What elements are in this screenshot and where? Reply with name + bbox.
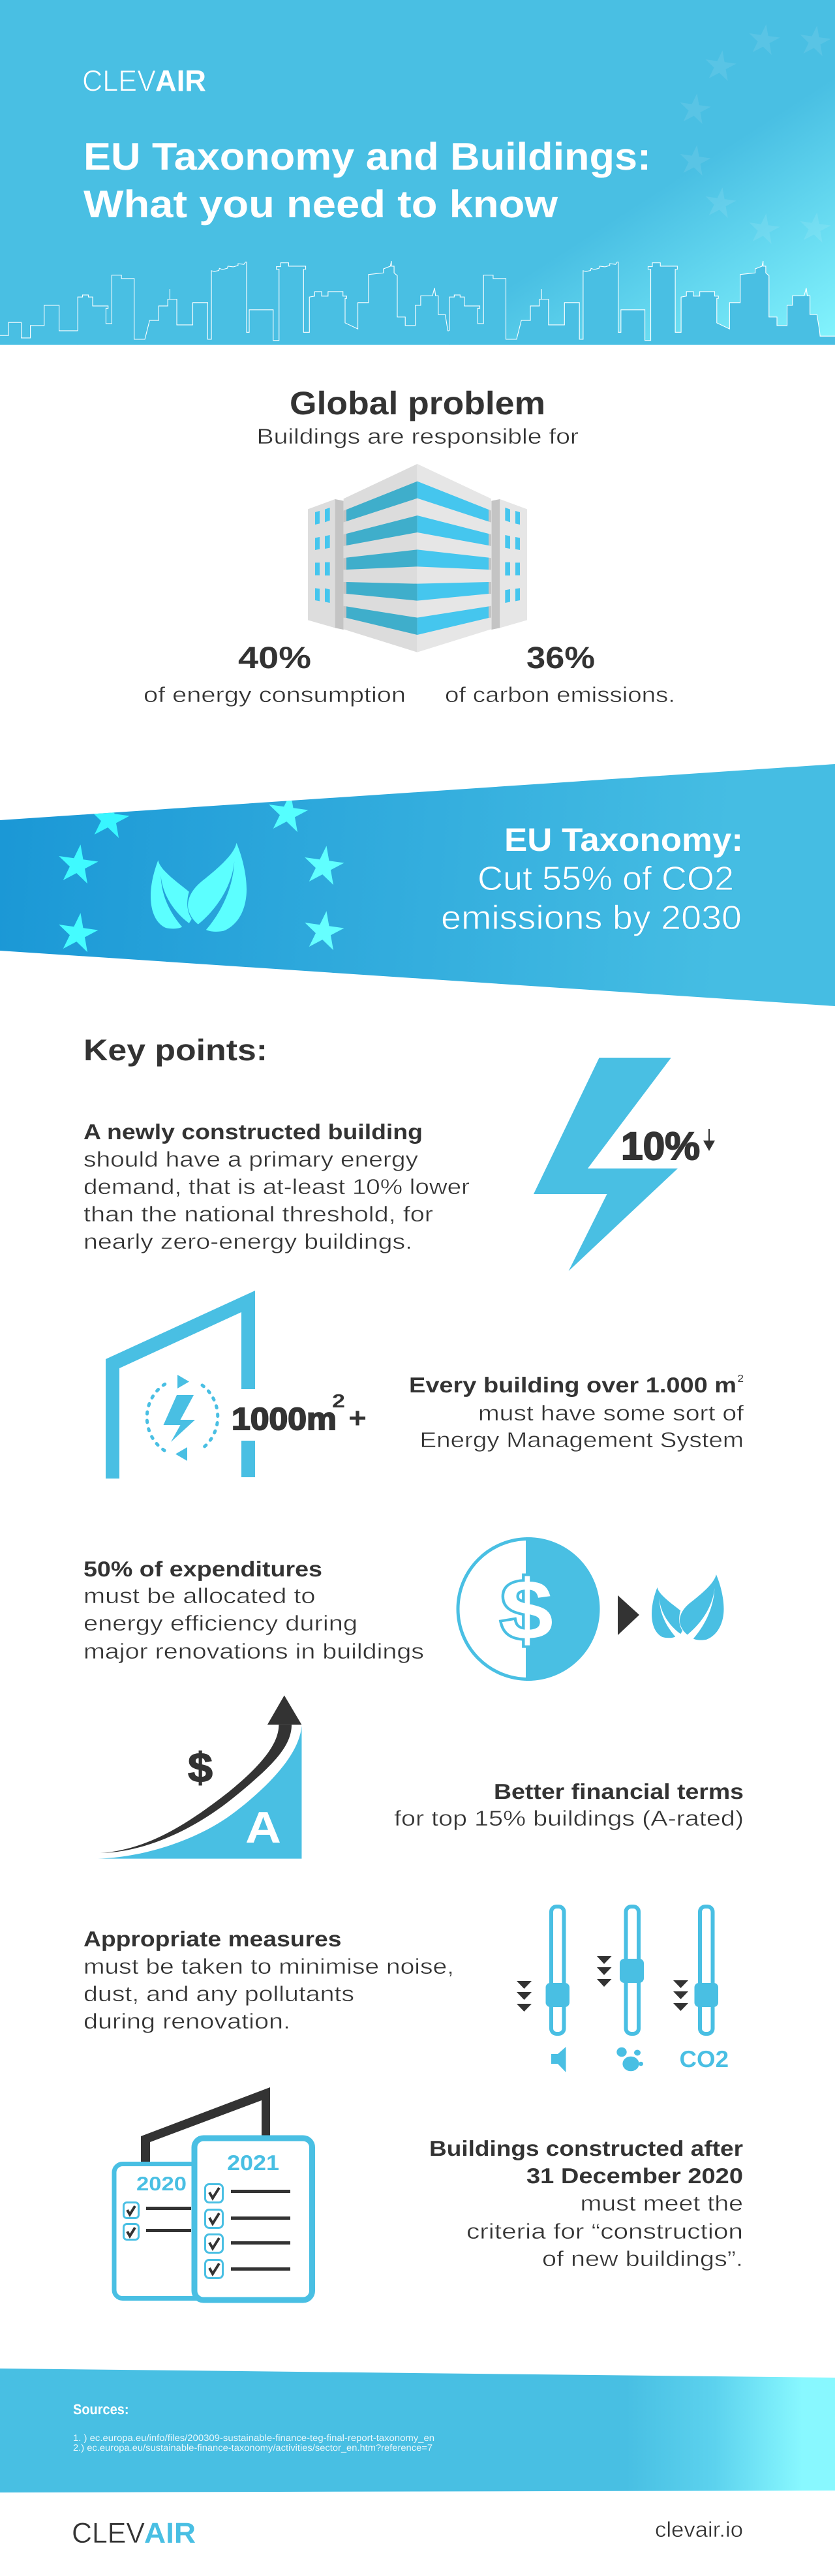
stat: energy consumption: 40%	[238, 640, 311, 675]
panel: sources band	[0, 2369, 835, 2492]
text: EU taxonomy goal: Cut 55% of CO2	[478, 860, 734, 898]
stat: energy consumption: of energy consumption	[144, 682, 406, 707]
panel: key point appropriate measures	[84, 1907, 729, 2072]
label: CO2: CO2	[680, 2046, 729, 2072]
sources list: 2.) ec.europa.eu/sustainable-finance-taxonomy/activities/sector_en.htm?reference=7	[73, 2442, 433, 2453]
text block: Appropriate measures	[84, 1927, 342, 1951]
text block	[429, 2136, 743, 2271]
text block: must have some sort of	[478, 1401, 744, 1425]
arrow	[618, 1595, 639, 1635]
icon: rising curve: $	[188, 1744, 213, 1791]
text block: of new buildings”.	[542, 2246, 743, 2271]
text block: Better financial terms	[494, 1779, 744, 1803]
skyline	[0, 261, 835, 345]
icon: checklists	[114, 2087, 312, 2300]
title: EU Taxonomy and Buildings:	[84, 135, 651, 178]
label: 10 percent down: 10%	[621, 1124, 700, 1168]
text block: should have a primary energy	[84, 1147, 419, 1171]
chart: level sliders	[517, 1907, 718, 2034]
panel: global problem	[144, 385, 675, 707]
title: What you need to know	[84, 183, 558, 226]
panel: EU taxonomy band	[0, 764, 835, 1006]
panel: key point financial terms	[98, 1695, 744, 1859]
text block: Every building over 1.000 m	[409, 1373, 736, 1397]
text block	[84, 1120, 470, 1253]
icon: EU stars	[55, 790, 346, 953]
text block	[409, 1373, 744, 1452]
panel: header	[0, 0, 835, 345]
text block: A newly constructed building	[84, 1120, 423, 1144]
text block: than the national threshold, for	[84, 1202, 433, 1226]
text block: during renovation.	[84, 2009, 290, 2033]
text block: major renovations in buildings	[84, 1639, 424, 1663]
icon: checklists: 2021	[227, 2151, 279, 2175]
sources list: 1. ) ec.europa.eu/info/files/200309-sustainable-finance-teg-final-report-taxonomy_en	[73, 2432, 434, 2443]
icon: checklists: 2020	[136, 2173, 187, 2195]
text block	[84, 1557, 424, 1663]
text: EU taxonomy goal: EU Taxonomy:	[504, 821, 743, 858]
text block: 2	[737, 1373, 744, 1385]
text block: energy efficiency during	[84, 1611, 357, 1635]
icon: building outline	[106, 1291, 255, 1479]
sources list	[73, 2432, 434, 2453]
footer logo: CLEV	[72, 2517, 145, 2549]
label: 1000 square metres: +	[348, 1402, 367, 1434]
icon: sound	[551, 2047, 566, 2072]
heading: key points: Key points:	[84, 1033, 267, 1067]
panel: key point expenditures	[84, 1537, 724, 1681]
footer url: clevair.io	[655, 2517, 743, 2541]
panel: key point new buildings	[114, 2087, 743, 2300]
text block: must be allocated to	[84, 1584, 316, 1608]
text: EU taxonomy goal: emissions by 2030	[441, 899, 742, 937]
icon: energy cycle	[147, 1375, 218, 1461]
footer logo: AIR	[144, 2517, 196, 2549]
icon: leaves	[151, 843, 247, 932]
text block: 50% of expenditures	[84, 1557, 322, 1581]
icon: rising curve: A	[245, 1803, 281, 1852]
text block	[84, 1927, 454, 2033]
icon: EU star ring	[678, 22, 832, 245]
text block	[394, 1779, 744, 1830]
text block: Buildings constructed after	[429, 2136, 743, 2160]
heading: Global problem	[290, 385, 545, 422]
title	[84, 135, 651, 226]
text block: nearly zero-energy buildings.	[84, 1229, 412, 1253]
label: 1000 square metres	[232, 1391, 367, 1437]
stat: carbon emissions: of carbon emissions.	[445, 682, 675, 707]
stat: carbon emissions	[445, 640, 675, 707]
text block: must be taken to minimise noise,	[84, 1954, 454, 1978]
text block: for top 15% buildings (A-rated)	[394, 1806, 744, 1830]
text block: must meet the	[581, 2191, 743, 2215]
stat: carbon emissions: 36%	[526, 640, 595, 675]
panel: key point primary energy	[84, 1058, 715, 1271]
icon: leaves	[652, 1574, 724, 1640]
icon: dust	[616, 2047, 643, 2071]
label: 1000 square metres: 1000m	[232, 1402, 337, 1437]
text: EU taxonomy goal	[441, 821, 743, 937]
icon: half-filled dollar coin: $	[501, 1562, 553, 1657]
subheading: Buildings are responsible for	[257, 424, 579, 448]
text block: dust, and any pollutants	[84, 1982, 354, 2006]
panel: key point energy management	[106, 1291, 744, 1479]
label: 1000 square metres: 2	[332, 1391, 345, 1412]
icon: lightning bolt	[534, 1058, 678, 1271]
icon: office building	[308, 464, 527, 652]
logo: CLEV	[82, 64, 156, 98]
icon: half-filled dollar coin	[458, 1537, 598, 1681]
icon: rising curve	[98, 1695, 301, 1859]
logo: AIR	[155, 64, 206, 98]
text block: demand, that is at-least 10% lower	[84, 1174, 470, 1199]
sources heading: Sources:	[73, 2401, 129, 2417]
text block: Energy Management System	[420, 1428, 744, 1452]
footer logo	[72, 2517, 196, 2549]
text block: criteria for “construction	[466, 2219, 743, 2243]
logo	[82, 64, 206, 98]
stat: energy consumption	[144, 640, 406, 707]
text block: 31 December 2020	[526, 2164, 743, 2188]
